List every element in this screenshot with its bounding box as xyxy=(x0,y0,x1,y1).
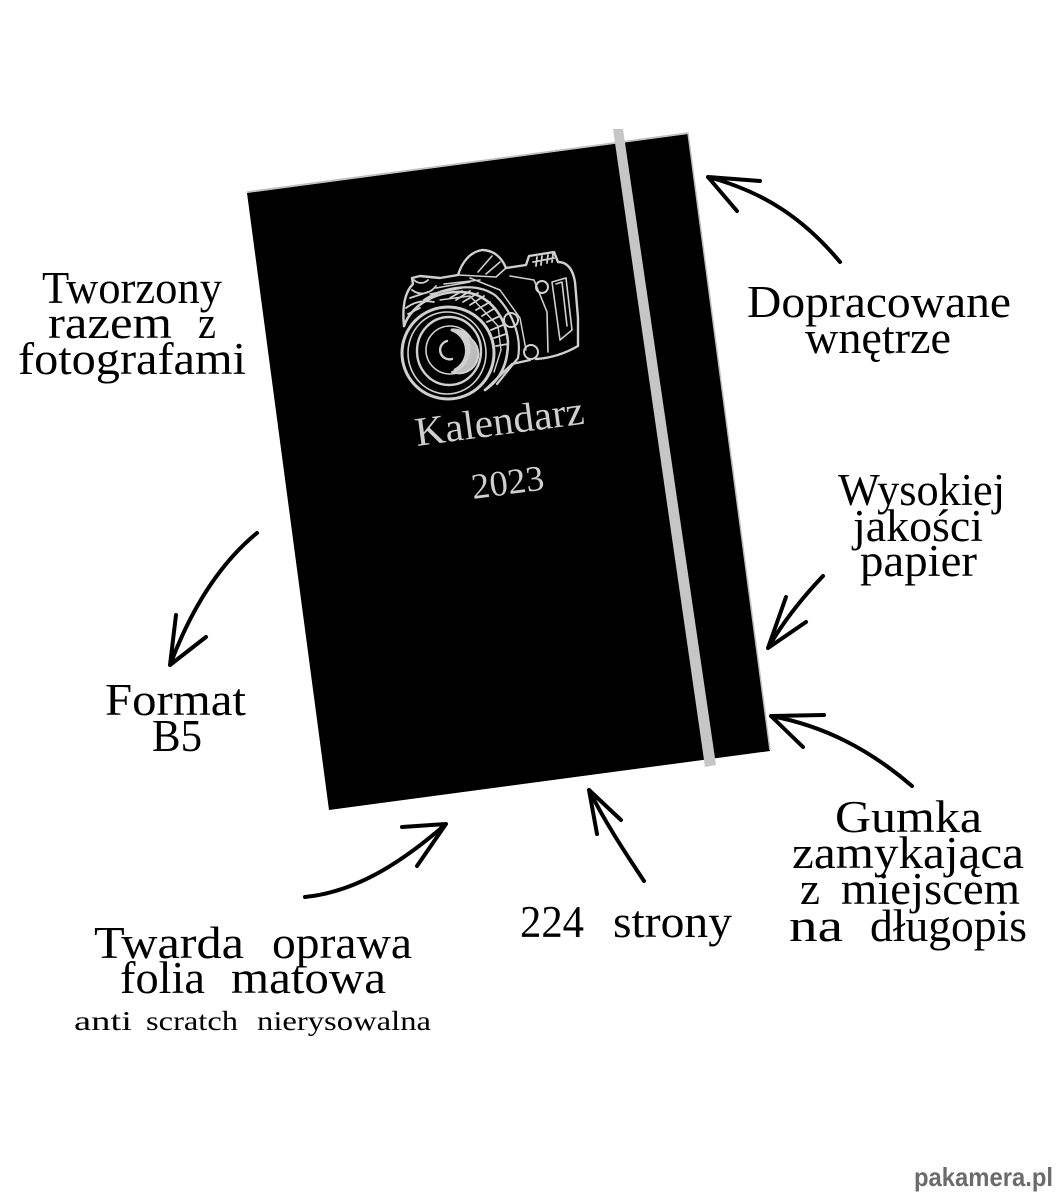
arrow: to elastic band xyxy=(771,715,912,786)
notebook xyxy=(247,129,770,810)
label: Gumka zamykająca z miejscem na długopis: zamykająca xyxy=(792,828,1024,878)
label: Format B5: B5 xyxy=(152,711,202,761)
label: 224 strony: 224 xyxy=(520,897,584,947)
label: Wysokiej jakości papier: jakości xyxy=(851,501,983,551)
label: Wysokiej jakości papier: Wysokiej xyxy=(838,465,1005,515)
label: Dopracowane wnętrze xyxy=(747,277,1011,363)
notebook cover xyxy=(247,134,770,810)
arrow: to paper xyxy=(768,576,823,648)
label: Wysokiej jakości papier xyxy=(838,465,1005,586)
arrow: to format xyxy=(170,533,257,665)
label: Format B5: Format xyxy=(105,675,247,725)
label: Gumka zamykająca z miejscem na długopis: z xyxy=(800,864,820,914)
label: Gumka zamykająca z miejscem na długopis: długopis xyxy=(870,901,1027,951)
label: Wysokiej jakości papier: papier xyxy=(860,536,977,586)
label: Tworzony razem z fotografami: z xyxy=(198,298,216,348)
label: Twarda oprawa folia matowa anti scratch nierysowalna: folia xyxy=(120,953,205,1003)
label: Tworzony razem z fotografami: fotografami xyxy=(18,334,246,384)
notebook top edge highlight xyxy=(247,133,770,750)
cover title: Kalendarz: Kalendarz xyxy=(412,387,587,455)
label: Gumka zamykająca z miejscem na długopis: miejscem xyxy=(841,864,1020,914)
label: Twarda oprawa folia matowa anti scratch nierysowalna: Twarda xyxy=(94,918,244,968)
label: 224 strony: strony xyxy=(613,897,733,947)
arrow: to hard cover xyxy=(305,824,446,897)
label: Twarda oprawa folia matowa anti scratch nierysowalna xyxy=(74,918,431,1036)
label: Tworzony razem z fotografami: Tworzony xyxy=(42,263,222,313)
label: Twarda oprawa folia matowa anti scratch nierysowalna: oprawa xyxy=(272,918,412,968)
icon: camera xyxy=(402,250,578,399)
label: Twarda oprawa folia matowa anti scratch nierysowalna: anti xyxy=(74,1006,132,1036)
label: Gumka zamykająca z miejscem na długopis: Gumka xyxy=(835,792,982,842)
label: Format B5 xyxy=(105,675,247,761)
label: Gumka zamykająca z miejscem na długopis xyxy=(789,792,1027,951)
label: 224 strony xyxy=(520,897,733,947)
label: Twarda oprawa folia matowa anti scratch nierysowalna: matowa xyxy=(231,953,386,1003)
arrow: to page count xyxy=(589,790,644,881)
label: Dopracowane wnętrze: wnętrze xyxy=(805,313,951,363)
cover year: 2023: 2023 xyxy=(469,458,546,507)
label: Twarda oprawa folia matowa anti scratch nierysowalna: nierysowalna xyxy=(257,1006,431,1036)
label: Gumka zamykająca z miejscem na długopis: na xyxy=(789,901,843,951)
elastic band xyxy=(613,129,716,767)
label: Tworzony razem z fotografami xyxy=(18,263,246,384)
watermark: pakamera.pl: pakamera.pl xyxy=(914,1162,1053,1192)
label: Dopracowane wnętrze: Dopracowane xyxy=(747,277,1011,327)
label: Twarda oprawa folia matowa anti scratch nierysowalna: scratch xyxy=(146,1006,239,1036)
label: Tworzony razem z fotografami: razem xyxy=(48,298,172,348)
arrow: to notebook interior xyxy=(708,177,840,262)
